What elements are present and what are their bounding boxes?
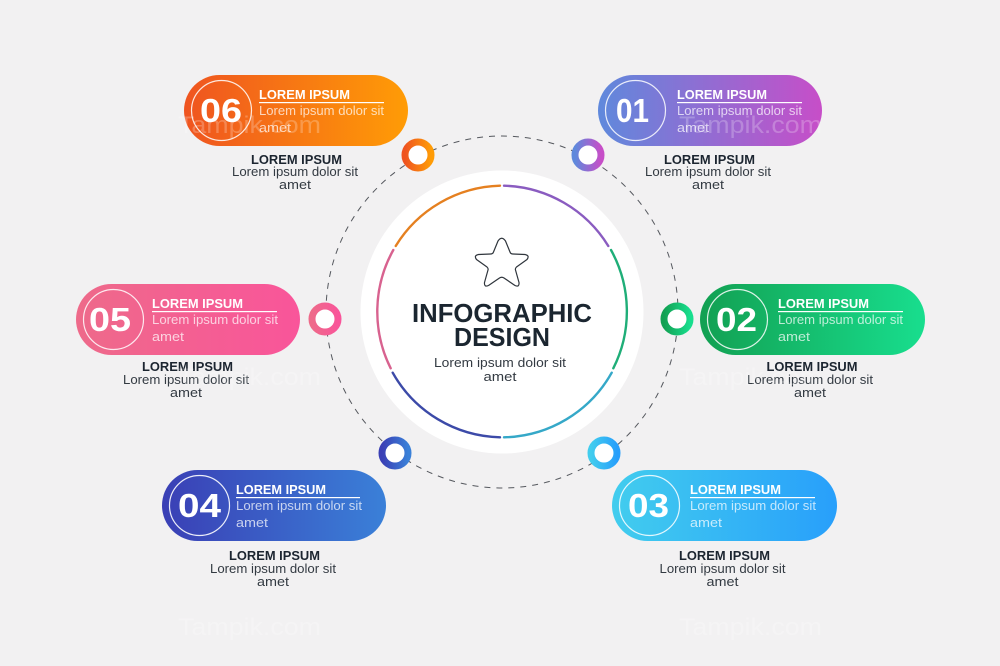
text block: step 05 caption: amet xyxy=(170,385,202,400)
text block: step 04 caption: amet xyxy=(257,574,289,589)
panel: step 04 pill: 04 xyxy=(178,487,222,524)
panel: step 06 pill: amet xyxy=(259,120,291,135)
central body text: Lorem ipsum dolor sit xyxy=(434,355,566,370)
text block: step 02 caption: amet xyxy=(794,385,826,400)
text block: step 04 caption xyxy=(210,548,336,589)
faint stock-site watermarks: Tampik.com xyxy=(178,112,321,139)
panel: step 02 pill: Lorem ipsum dolor sit xyxy=(778,312,903,327)
text block: step 06 caption: LOREM IPSUM xyxy=(251,152,342,167)
panel: step 05 pill: 05 xyxy=(89,301,131,338)
text block: step 06 caption: Lorem ipsum dolor sit xyxy=(232,164,358,179)
coloured segmented ring xyxy=(377,186,627,437)
panel: step 04 pill: LOREM IPSUM xyxy=(236,482,326,497)
text block: step 01 caption: Lorem ipsum dolor sit xyxy=(645,164,771,179)
panel: step 02 pill: LOREM IPSUM xyxy=(778,296,869,311)
panel: step 03 pill: Lorem ipsum dolor sit xyxy=(690,498,816,513)
text block: step 05 caption xyxy=(123,359,249,400)
heading: infographic design: DESIGN xyxy=(454,322,550,352)
text block: step 03 caption xyxy=(660,548,786,589)
text block: step 06 caption xyxy=(232,152,358,192)
panel: step 04 pill: amet xyxy=(236,515,268,530)
panel: step 06 pill xyxy=(184,75,408,146)
panel: step 03 pill: 03 xyxy=(628,487,669,524)
faint stock-site watermarks: Tampik.com xyxy=(679,614,822,641)
text block: step 01 caption: amet xyxy=(692,177,724,192)
text block: step 01 caption: LOREM IPSUM xyxy=(664,152,755,167)
panel: step 02 pill: amet xyxy=(778,329,810,344)
ring node 01 xyxy=(575,142,601,168)
icon: star xyxy=(475,238,528,286)
faint stock-site watermarks xyxy=(178,112,822,641)
text block: step 02 caption: LOREM IPSUM xyxy=(766,359,858,374)
text block: step 03 caption: Lorem ipsum dolor sit xyxy=(660,561,786,576)
panel: step 02 pill xyxy=(700,284,925,355)
panel: step 01 pill: LOREM IPSUM xyxy=(677,87,767,102)
panel: step 06 pill: LOREM IPSUM xyxy=(259,87,350,102)
panel: step 03 pill: LOREM IPSUM xyxy=(690,482,781,497)
panel: step 01 pill: 01 xyxy=(616,92,649,129)
text block: step 03 caption: LOREM IPSUM xyxy=(679,548,770,563)
text block: step 04 caption: Lorem ipsum dolor sit xyxy=(210,561,336,576)
panel: step 02 pill: 02 xyxy=(716,301,757,338)
panel: step 05 pill xyxy=(76,284,300,355)
panel: step 05 pill: Lorem ipsum dolor sit xyxy=(152,312,278,327)
panel: step 04 pill: Lorem ipsum dolor sit xyxy=(236,498,362,513)
text block: step 04 caption: LOREM IPSUM xyxy=(229,548,320,563)
panel: step 06 pill: 06 xyxy=(200,92,242,129)
panel: step 04 pill xyxy=(162,470,386,541)
ring node 02 xyxy=(664,306,690,332)
ring node 05 xyxy=(312,306,338,332)
dashed orbit circle xyxy=(326,136,678,488)
text block: step 02 caption: Lorem ipsum dolor sit xyxy=(747,372,873,387)
heading: infographic design: INFOGRAPHIC xyxy=(412,298,592,328)
panel: central circle xyxy=(360,170,644,454)
faint stock-site watermarks: Tampik.com xyxy=(679,112,822,139)
heading: infographic design xyxy=(412,298,592,352)
text block: step 02 caption xyxy=(747,359,873,400)
panel: step 03 pill: amet xyxy=(690,515,722,530)
ring node 04 xyxy=(382,440,408,466)
faint stock-site watermarks: Tampik.com xyxy=(679,364,822,391)
text block: step 05 caption: Lorem ipsum dolor sit xyxy=(123,372,249,387)
central body text xyxy=(434,355,566,384)
panel: step 01 pill: amet xyxy=(677,120,709,135)
central body text: amet xyxy=(484,369,517,384)
ring node 03 xyxy=(591,440,617,466)
faint stock-site watermarks: Tampik.com xyxy=(178,614,321,641)
panel: step 01 pill: Lorem ipsum dolor sit xyxy=(677,103,802,118)
text block: step 05 caption: LOREM IPSUM xyxy=(142,359,233,374)
panel: step 03 pill xyxy=(612,470,837,541)
ring node 06 xyxy=(405,142,431,168)
panel: step 01 pill xyxy=(598,75,822,146)
text block: step 01 caption xyxy=(645,152,771,192)
panel: step 05 pill: LOREM IPSUM xyxy=(152,296,243,311)
panel: step 06 pill: Lorem ipsum dolor sit xyxy=(259,103,384,118)
faint stock-site watermarks: Tampik.com xyxy=(178,364,321,391)
panel: step 05 pill: amet xyxy=(152,329,184,344)
text block: step 06 caption: amet xyxy=(279,177,311,192)
text block: step 03 caption: amet xyxy=(706,574,739,589)
